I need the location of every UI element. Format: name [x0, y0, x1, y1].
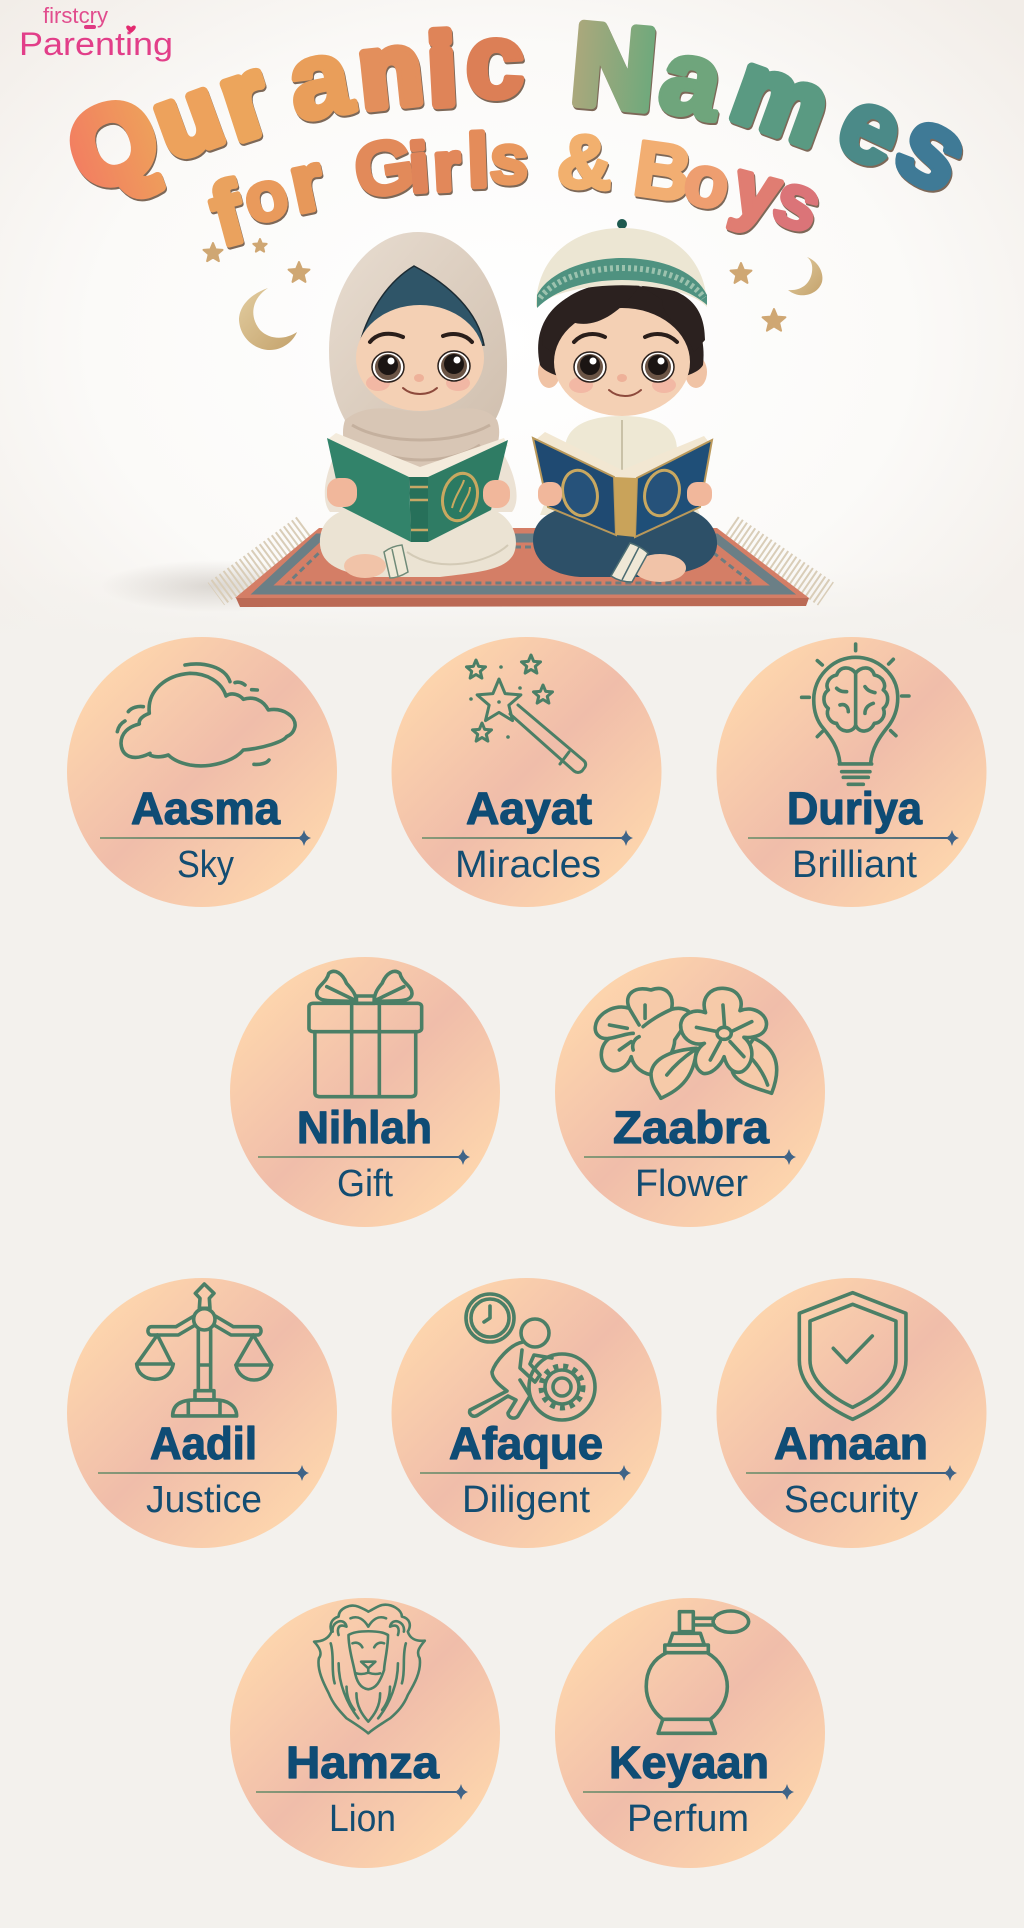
boy eyes — [574, 352, 674, 382]
logo: FirstCry Parenting — [19, 3, 173, 62]
boy face — [554, 308, 690, 416]
icon: magic wand — [466, 655, 586, 772]
disc — [67, 637, 337, 907]
disc — [716, 637, 986, 907]
boy cap — [536, 219, 707, 308]
title: Quranic Names — [53, 1, 991, 217]
logo: FirstCry Parenting: firstcry — [43, 3, 108, 28]
name: Aadil — [150, 1418, 257, 1469]
icon: balance scale — [137, 1284, 272, 1416]
boy hands — [538, 482, 712, 506]
girl sleeves — [325, 445, 517, 512]
subtitle: for Girls & Boys: o — [235, 153, 296, 239]
girl hands — [327, 478, 510, 508]
divider with star — [748, 830, 959, 846]
panel: Hamza — [230, 1598, 500, 1868]
boy trousers — [533, 505, 717, 577]
name: Nihlah — [297, 1102, 432, 1153]
icon: perfume bottle — [646, 1611, 749, 1733]
meaning: Diligent — [462, 1479, 590, 1521]
disc — [392, 637, 662, 907]
disc — [230, 1598, 500, 1868]
boy hair — [538, 285, 704, 384]
divider with star — [584, 1149, 796, 1165]
name: Aasma — [131, 783, 281, 834]
meaning: Gift — [337, 1163, 393, 1205]
subtitle: for Girls & Boys: & — [555, 119, 615, 206]
decoration: left crescent moon — [239, 288, 297, 350]
title: Quranic Names: a — [651, 15, 734, 143]
panel: Afaque — [392, 1278, 662, 1548]
divider with star — [746, 1465, 957, 1481]
subtitle: for Girls & Boys: B — [629, 123, 697, 218]
boy kurta — [540, 416, 700, 515]
name: Hamza — [286, 1737, 440, 1788]
title: Quranic Names: s — [877, 80, 991, 217]
panel: Duriya — [716, 637, 986, 907]
girl book — [327, 433, 508, 542]
panel: Amaan — [716, 1278, 986, 1548]
subtitle: for Girls & Boys: r — [432, 128, 462, 206]
meaning: Justice — [146, 1479, 262, 1521]
icon: person pushing gear with clock — [466, 1294, 595, 1420]
title: Quranic Names: m — [720, 29, 844, 168]
subtitle: for Girls & Boys: l — [466, 119, 490, 202]
disc — [392, 1278, 662, 1548]
name: Duriya — [787, 783, 923, 834]
panel: Aasma — [67, 637, 337, 907]
girl eyes — [372, 351, 470, 382]
illustration: prayer rug — [100, 528, 826, 612]
icon: gift box — [309, 971, 422, 1097]
meaning: Lion — [329, 1798, 396, 1840]
name: Aayat — [466, 783, 592, 834]
girl hijab — [329, 232, 507, 440]
illustration: boy reading — [533, 219, 717, 582]
panel: Aadil — [67, 1278, 337, 1548]
subtitle: for Girls & Boys: i — [407, 129, 431, 207]
illustration: girl reading — [320, 232, 517, 578]
girl scarf wrap — [343, 408, 499, 478]
meaning: Flower — [635, 1163, 748, 1205]
panel: Keyaan — [555, 1598, 825, 1868]
disc — [230, 957, 500, 1227]
subtitle: for Girls & Boys: s — [488, 119, 530, 199]
girl brows, nose and smile — [370, 334, 472, 394]
name: Amaan — [774, 1418, 928, 1469]
meaning: Brilliant — [792, 844, 917, 886]
decoration: stars — [203, 239, 785, 331]
title: Quranic Names: Q — [53, 72, 173, 215]
girl under-scarf — [358, 266, 484, 354]
logo: FirstCry Parenting: Parenting — [19, 26, 173, 62]
meaning: Perfum — [627, 1798, 749, 1840]
disc — [555, 957, 825, 1227]
divider with star — [98, 1465, 309, 1481]
subtitle: for Girls & Boys: s — [763, 153, 834, 250]
icon: cloud — [117, 664, 295, 766]
boy ears — [538, 356, 707, 388]
decoration: right crescent moon — [788, 257, 822, 295]
icon: lion head — [314, 1605, 425, 1733]
name: Keyaan — [609, 1737, 769, 1788]
girl face — [356, 305, 484, 411]
divider with star — [100, 830, 311, 846]
girl trousers — [320, 505, 516, 577]
girl cheeks — [366, 375, 470, 391]
boy cheeks — [569, 377, 676, 393]
icon: shield with check — [799, 1293, 906, 1419]
divider with star — [258, 1149, 470, 1165]
panel: Nihlah — [230, 957, 500, 1227]
title: Quranic Names: n — [353, 10, 427, 130]
name: Zaabra — [613, 1102, 770, 1153]
divider with star — [422, 830, 633, 846]
subtitle: for Girls & Boys: f — [200, 162, 255, 265]
boy brows, nose and smile — [574, 334, 677, 396]
boy book — [533, 432, 712, 537]
title: Quranic Names: N — [567, 1, 660, 134]
girl foot and cuff — [344, 545, 408, 578]
panel: Zaabra — [555, 957, 825, 1227]
meaning: Sky — [177, 844, 234, 886]
hero background — [0, 0, 1024, 640]
meaning: Miracles — [455, 844, 601, 886]
divider with star — [583, 1784, 794, 1800]
subtitle: for Girls & Boys: o — [677, 138, 737, 226]
subtitle: for Girls & Boys — [200, 119, 834, 265]
icon: bulb with brain — [802, 644, 909, 784]
boy foot and cuff — [611, 543, 686, 582]
title: Quranic Names: c — [466, 2, 524, 120]
title: Quranic Names: e — [822, 63, 922, 190]
title: Quranic Names: a — [279, 14, 360, 143]
disc — [555, 1598, 825, 1868]
disc — [67, 1278, 337, 1548]
subtitle: for Girls & Boys: r — [282, 136, 331, 229]
icon: flowers — [595, 988, 777, 1098]
meaning: Security — [784, 1479, 918, 1521]
subtitle: for Girls & Boys: G — [349, 122, 419, 215]
title: Quranic Names: u — [139, 54, 235, 181]
disc — [716, 1278, 986, 1548]
subtitle: for Girls & Boys: y — [725, 142, 789, 239]
name: Afaque — [449, 1418, 603, 1469]
title: Quranic Names: r — [205, 34, 284, 164]
panel: Aayat — [392, 637, 662, 907]
title: Quranic Names: i — [425, 13, 459, 127]
boy fringe — [542, 283, 705, 352]
divider with star — [256, 1784, 468, 1800]
divider with star — [420, 1465, 631, 1481]
